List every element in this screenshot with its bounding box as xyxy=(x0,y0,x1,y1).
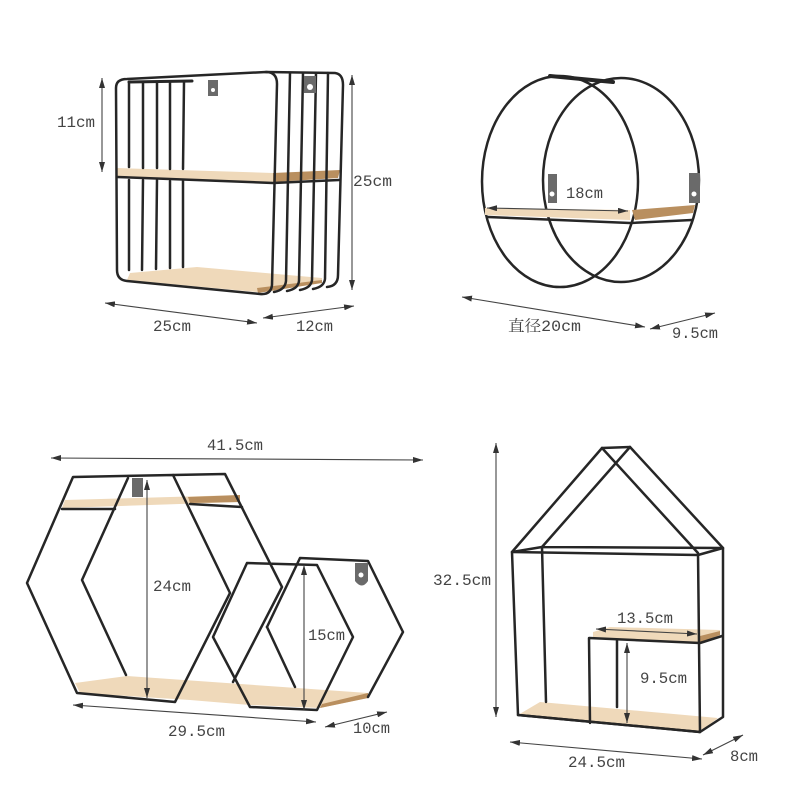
label: 9.5cm: 9.5cm xyxy=(672,325,718,343)
arrow: 8cm xyxy=(703,735,743,755)
icon: hexagon shelf brackets xyxy=(132,478,368,586)
arrow: 24cm xyxy=(146,480,148,698)
round shelf wire under board xyxy=(488,217,692,223)
label: 32.5cm: 32.5cm xyxy=(433,572,491,590)
arrow: diameter 20cm xyxy=(462,297,645,327)
arrow: 41.5cm xyxy=(51,458,423,460)
hexagon shelf wood boards xyxy=(62,495,368,708)
label: diameter 20cm: 直径20cm xyxy=(508,317,581,336)
label: 24cm: 24cm xyxy=(153,578,191,596)
label: 8cm: 8cm xyxy=(730,748,758,766)
label: 24.5cm: 24.5cm xyxy=(568,754,625,772)
arrow: 9.5cm height xyxy=(626,643,628,723)
panel: square shelf xyxy=(57,72,392,336)
label: 9.5cm: 9.5cm xyxy=(640,670,687,688)
arrow: 10cm xyxy=(325,712,387,727)
arrow: 13.5cm xyxy=(596,629,697,634)
arrow: 18cm xyxy=(487,208,628,211)
arrow: 12cm depth xyxy=(263,306,354,318)
arrow: 24.5cm xyxy=(510,742,702,759)
arrow: 11cm height xyxy=(101,78,103,172)
arrow: 32.5cm xyxy=(495,443,497,717)
round shelf wood board xyxy=(485,205,695,220)
house shelf wood boards xyxy=(518,627,720,732)
square shelf wire frame xyxy=(116,72,343,294)
small hexagon wire frame xyxy=(213,558,403,710)
label: 25cm width: 25cm xyxy=(153,318,191,336)
arrow: 29.5cm xyxy=(73,705,316,722)
icon: square shelf hanging brackets xyxy=(208,76,316,96)
large hexagon wire frame xyxy=(27,474,282,702)
label: 18cm: 18cm xyxy=(566,185,603,203)
arrow: 9.5cm depth xyxy=(650,313,715,329)
house shelf wire frame xyxy=(512,447,723,732)
label: 41.5cm: 41.5cm xyxy=(207,437,263,455)
label: 25cm height: 25cm xyxy=(353,173,392,191)
square shelf wood boards xyxy=(117,168,340,293)
panel: house shelf xyxy=(433,443,758,772)
label: 13.5cm: 13.5cm xyxy=(617,610,673,628)
label: 12cm: 12cm xyxy=(296,318,333,336)
label: 29.5cm: 29.5cm xyxy=(168,723,225,741)
round shelf wire hoops xyxy=(482,76,699,287)
arrow: 25cm height xyxy=(351,75,353,290)
label: 15cm: 15cm xyxy=(308,627,345,645)
panel: hexagon shelves xyxy=(27,437,423,741)
label: 10cm: 10cm xyxy=(353,720,390,738)
icon: round shelf brackets xyxy=(548,173,700,203)
label: 11cm: 11cm xyxy=(57,114,95,132)
panel: round shelf xyxy=(462,76,718,343)
arrow: 15cm xyxy=(303,565,305,710)
arrow: 25cm width xyxy=(105,303,257,323)
